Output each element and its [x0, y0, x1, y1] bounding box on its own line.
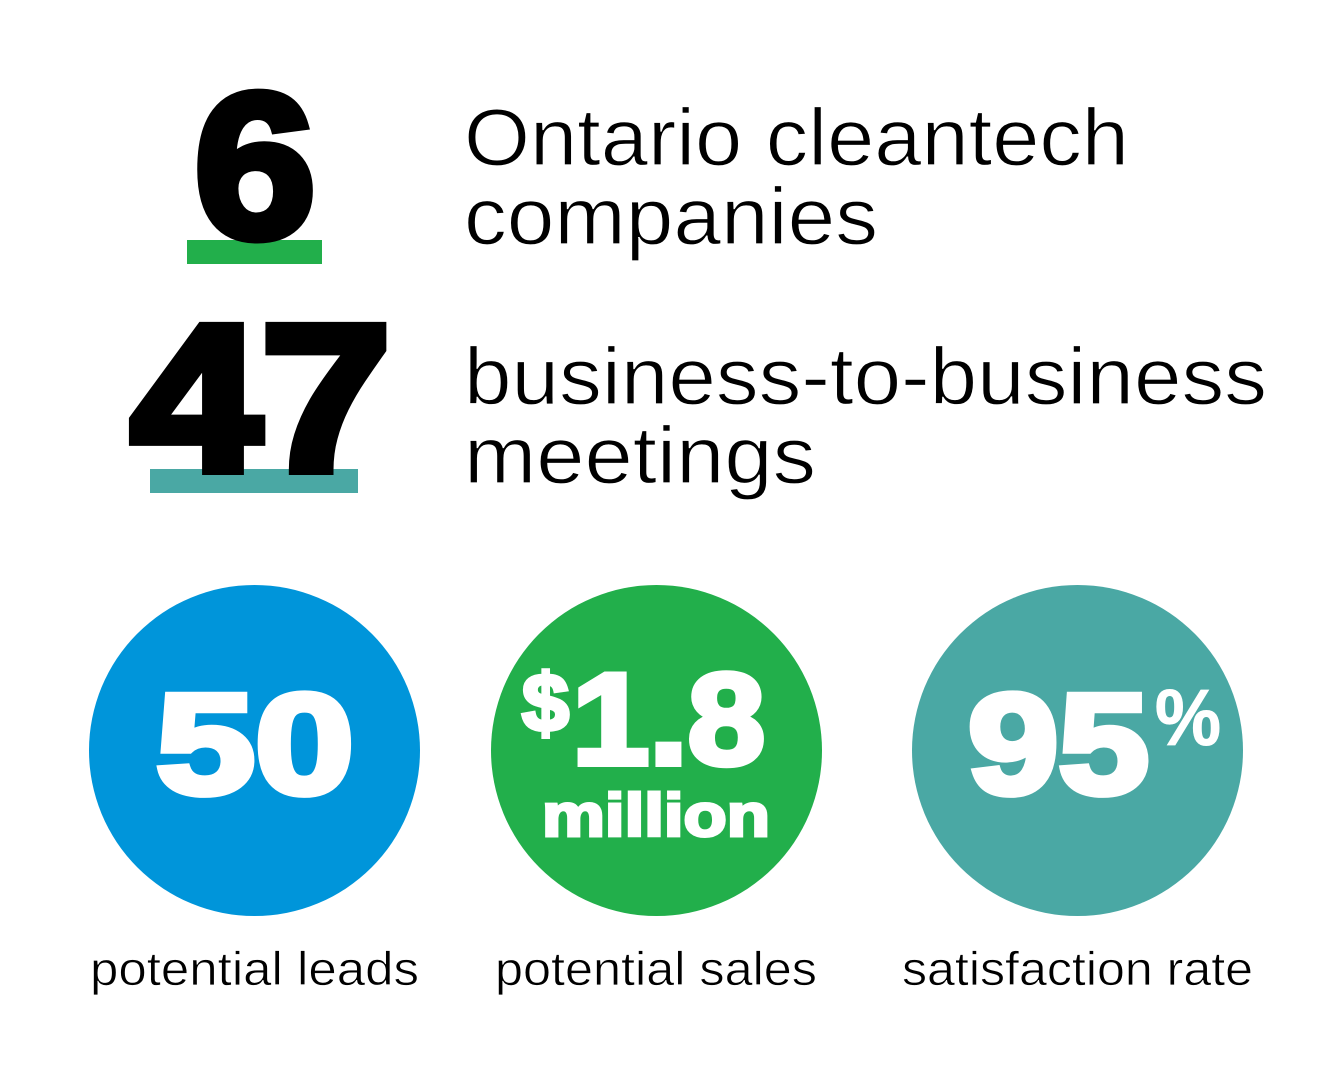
- number: 95: 95: [968, 665, 1149, 824]
- stat circle: 50 potential leads: [89, 585, 420, 995]
- number: 50: 50: [156, 665, 354, 824]
- circle: teal: [912, 585, 1243, 916]
- symbol: dollar: $: [522, 658, 569, 749]
- label: satisfaction rate: satisfaction rate: [902, 942, 1253, 995]
- circle: green: [491, 585, 822, 916]
- accent bar: green: [187, 240, 322, 264]
- circle: blue: [89, 585, 420, 916]
- stat: 47 meetings: [131, 283, 1267, 515]
- stat: 6 companies: [187, 51, 1129, 281]
- accent bar: teal: [150, 469, 358, 493]
- number: 1.8: 1.8: [572, 646, 765, 792]
- label: business-to-business meetings: [464, 332, 1267, 501]
- label: potential sales: potential sales: [495, 942, 817, 995]
- stat circle: $1.8 million potential sales: [491, 585, 822, 995]
- label: business-to-business meetings: business-to-business: [464, 332, 1267, 422]
- stat circle: 95% satisfaction rate: [902, 585, 1253, 995]
- symbol: percent: %: [1155, 673, 1221, 762]
- text: million: million: [542, 782, 770, 849]
- label: Ontario cleantech companies: Ontario cleantech: [464, 93, 1129, 183]
- label: business-to-business meetings: meetings: [464, 411, 816, 501]
- label: Ontario cleantech companies: companies: [464, 172, 878, 262]
- number: 6: 6: [194, 51, 316, 281]
- label: potential leads: potential leads: [90, 942, 419, 995]
- label: Ontario cleantech companies: [464, 93, 1129, 262]
- number: 47: 47: [131, 283, 391, 515]
